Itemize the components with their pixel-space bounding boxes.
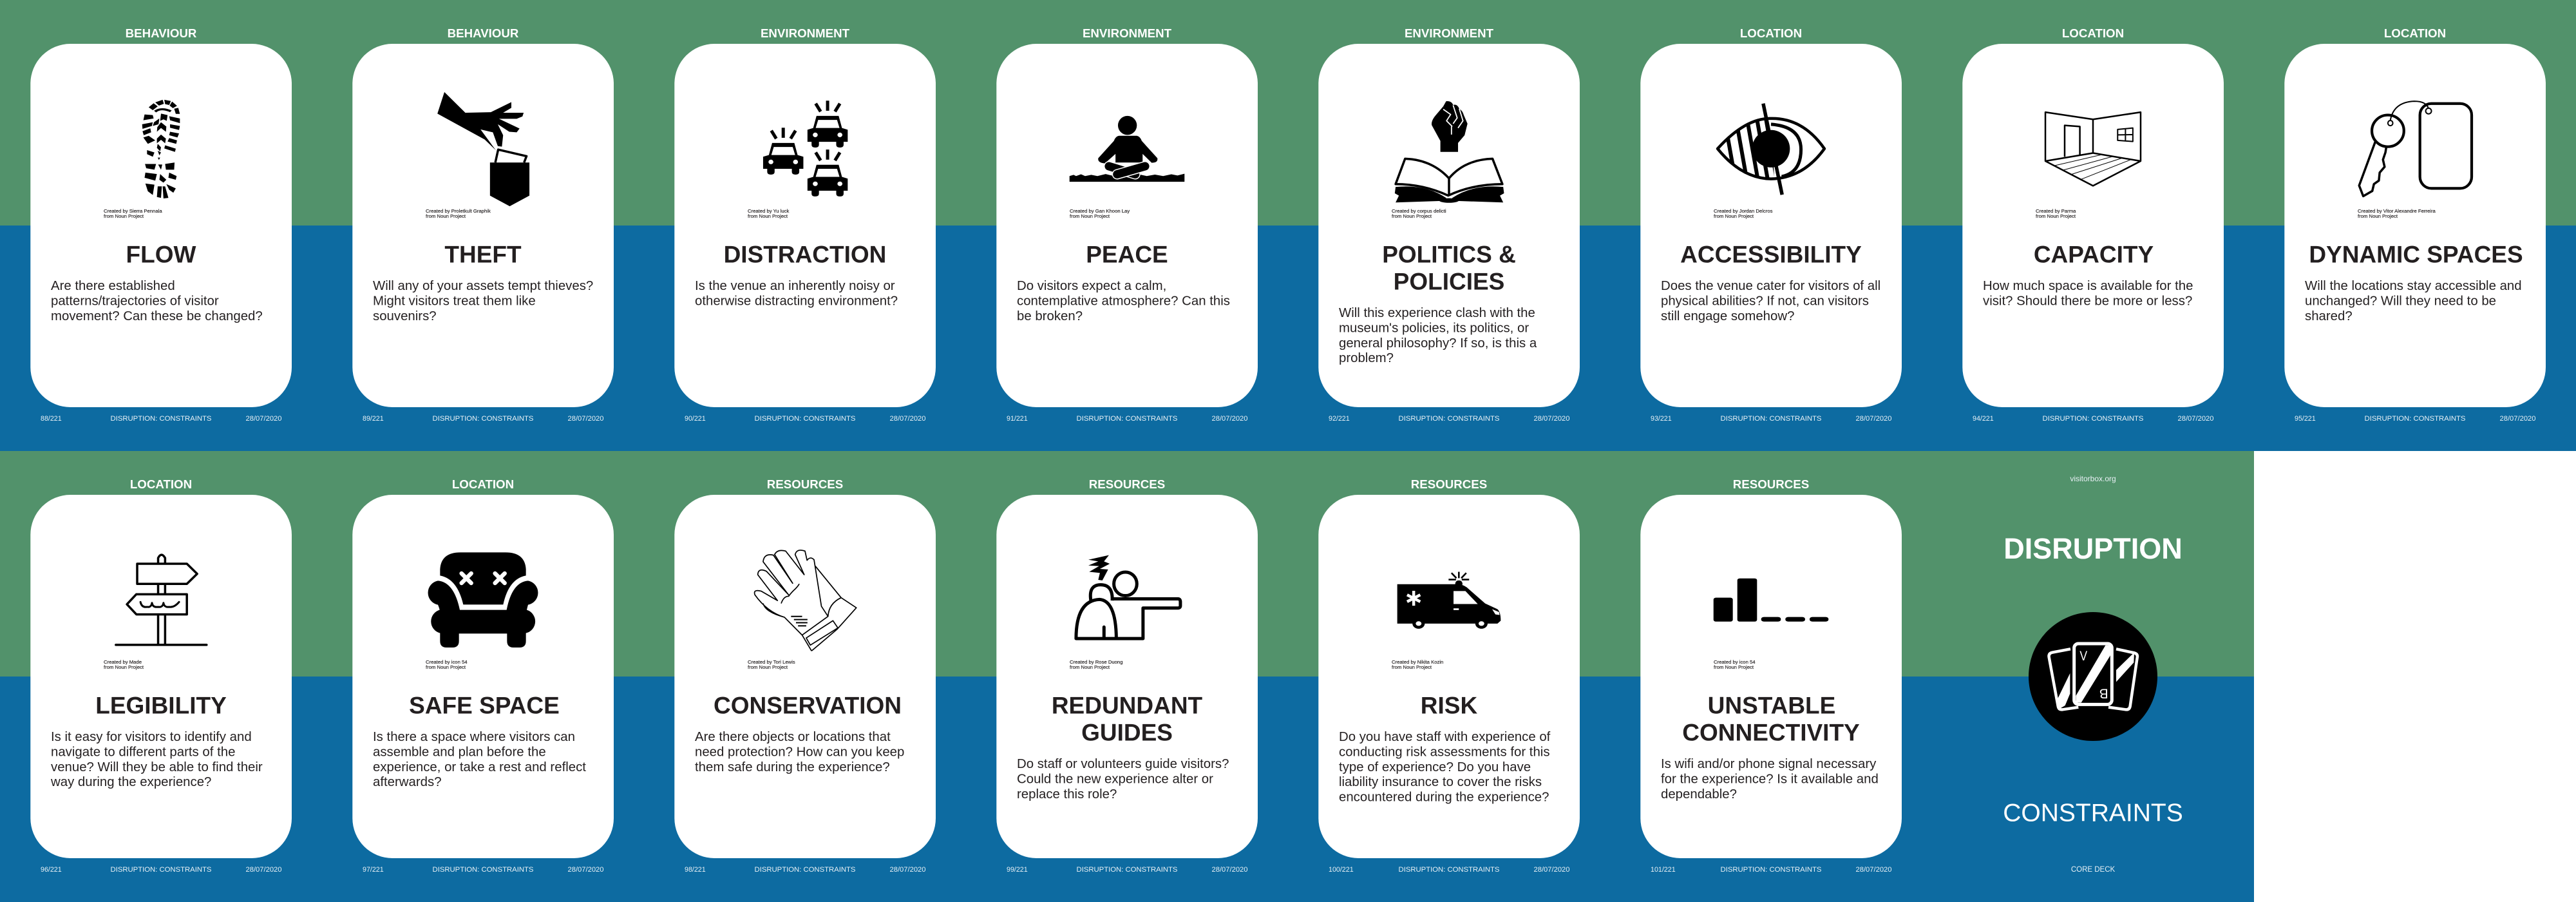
icon credit: Created by Proletkult Graphik bbox=[426, 208, 491, 214]
date: 28/07/2020 bbox=[1856, 415, 1892, 423]
card title: ACCESSIBILITY bbox=[1680, 241, 1862, 267]
category label: LOCATION bbox=[130, 477, 192, 491]
question: general philosophy? If so, is this a bbox=[1339, 336, 1537, 350]
card title: PEACE bbox=[1086, 241, 1168, 267]
icon credit: from Noun Project bbox=[1070, 213, 1110, 219]
question: unchanged? Will they need to be bbox=[2305, 294, 2496, 308]
question: Might visitors treat them like bbox=[373, 294, 536, 308]
card panel bbox=[1962, 44, 2224, 407]
icon credit: Created by icon 54 bbox=[426, 659, 468, 665]
icon: key with tag bbox=[2359, 101, 2472, 196]
question: museum's policies, its politics, or bbox=[1339, 321, 1529, 335]
card panel bbox=[674, 495, 936, 858]
question: still engage somehow? bbox=[1661, 309, 1794, 323]
date: 28/07/2020 bbox=[890, 415, 926, 423]
icon credit: from Noun Project bbox=[1392, 664, 1432, 670]
icon: obscured eye bbox=[1718, 104, 1824, 195]
card panel bbox=[30, 44, 292, 407]
icon credit: from Noun Project bbox=[426, 664, 466, 670]
question: encountered during the experience? bbox=[1339, 791, 1549, 805]
question: venue? Will they be able to find their bbox=[51, 760, 263, 774]
category label: RESOURCES bbox=[1089, 477, 1165, 491]
card panel bbox=[352, 44, 614, 407]
question: liability insurance to cover the risks bbox=[1339, 775, 1542, 789]
question: souvenirs? bbox=[373, 309, 437, 323]
category label: ENVIRONMENT bbox=[761, 26, 850, 40]
card number: 96/221 bbox=[41, 866, 62, 874]
question: problem? bbox=[1339, 351, 1394, 365]
card title: REDUNDANT bbox=[1052, 692, 1203, 718]
icon: fist over open book bbox=[1395, 101, 1504, 203]
card number: 98/221 bbox=[685, 866, 706, 874]
card title: FLOW bbox=[126, 241, 196, 267]
icon: protective gloves bbox=[755, 550, 857, 651]
card: Dynamic Spaces bbox=[2284, 26, 2546, 423]
category label: LOCATION bbox=[2062, 26, 2124, 40]
card panel bbox=[674, 44, 936, 407]
icon credit: Created by Made bbox=[104, 659, 142, 665]
card: Risk bbox=[1318, 477, 1580, 874]
card panel bbox=[1318, 495, 1580, 858]
icon credit: Created by Sierra Pennala bbox=[104, 208, 162, 214]
card: Legibility bbox=[30, 477, 292, 874]
card: Safe Space bbox=[352, 477, 614, 874]
icon credit: Created by Vitor Alexandre Ferreira bbox=[2358, 208, 2436, 214]
card number: 94/221 bbox=[1973, 415, 1994, 423]
card panel bbox=[352, 495, 614, 858]
card title: DYNAMIC SPACES bbox=[2309, 241, 2523, 267]
icon: three honking cars bbox=[763, 101, 848, 197]
icon credit: from Noun Project bbox=[748, 664, 788, 670]
card number: 91/221 bbox=[1007, 415, 1028, 423]
question: Is there a space where visitors can bbox=[373, 730, 575, 744]
question: Are there objects or locations that bbox=[695, 730, 891, 744]
icon credit: Created by Jordan Delcros bbox=[1714, 208, 1773, 214]
deck name: DISRUPTION: CONSTRAINTS bbox=[433, 415, 534, 423]
card: Accessibility bbox=[1640, 26, 1902, 423]
icon credit: from Noun Project bbox=[104, 664, 144, 670]
deck name: DISRUPTION: CONSTRAINTS bbox=[1077, 866, 1178, 874]
category label: BEHAVIOUR bbox=[126, 26, 197, 40]
icon credit: Created by corpus delicti bbox=[1392, 208, 1446, 214]
card title: UNSTABLE bbox=[1708, 692, 1835, 718]
question: patterns/trajectories of visitor bbox=[51, 294, 219, 308]
card: Redundant Guides bbox=[996, 477, 1258, 874]
deck label: CORE DECK bbox=[2071, 866, 2116, 874]
card title: LEGIBILITY bbox=[95, 692, 227, 718]
category label: LOCATION bbox=[452, 477, 514, 491]
icon credit: from Noun Project bbox=[1714, 664, 1754, 670]
website: visitorbox.org bbox=[2070, 474, 2116, 483]
icon credit: Created by Parma bbox=[2036, 208, 2076, 214]
card title: DISTRACTION bbox=[724, 241, 886, 267]
deck name: DISRUPTION: CONSTRAINTS bbox=[755, 415, 856, 423]
card number: 97/221 bbox=[363, 866, 384, 874]
card: Conservation bbox=[674, 477, 936, 874]
icon credit: Created by Tori Lewis bbox=[748, 659, 795, 665]
cover subtitle: constraints: CONSTRAINTS bbox=[2003, 799, 2183, 827]
question: replace this role? bbox=[1017, 787, 1117, 801]
card title: GUIDES bbox=[1081, 719, 1173, 745]
icon: meditating figure bbox=[1070, 116, 1184, 182]
category label: RESOURCES bbox=[1411, 477, 1487, 491]
category label: RESOURCES bbox=[1733, 477, 1809, 491]
question: experience, or take a rest and reflect bbox=[373, 760, 586, 774]
card title: SAFE SPACE bbox=[409, 692, 560, 718]
question: Is the venue an inherently noisy or bbox=[695, 279, 895, 293]
card title: CAPACITY bbox=[2034, 241, 2154, 267]
icon credit: from Noun Project bbox=[2036, 213, 2076, 219]
logo: three cards in black circle: B bbox=[2099, 686, 2108, 700]
card panel bbox=[1640, 495, 1902, 858]
icon credit: from Noun Project bbox=[426, 213, 466, 219]
deck name: DISRUPTION: CONSTRAINTS bbox=[1077, 415, 1178, 423]
question: Will the locations stay accessible and bbox=[2305, 279, 2522, 293]
question: Will this experience clash with the bbox=[1339, 306, 1535, 320]
question: need protection? How can you keep bbox=[695, 745, 904, 759]
card: Flow bbox=[30, 26, 292, 423]
question: Is wifi and/or phone signal necessary bbox=[1661, 757, 1877, 771]
question: How much space is available for the bbox=[1983, 279, 2193, 293]
question: for the experience? Is it available and bbox=[1661, 772, 1879, 786]
deck name: DISRUPTION: CONSTRAINTS bbox=[433, 866, 534, 874]
date: 28/07/2020 bbox=[246, 415, 282, 423]
deck name: DISRUPTION: CONSTRAINTS bbox=[1721, 415, 1822, 423]
question: them safe during the experience? bbox=[695, 760, 890, 774]
date: 28/07/2020 bbox=[246, 866, 282, 874]
category label: RESOURCES bbox=[767, 477, 843, 491]
category label: LOCATION bbox=[2384, 26, 2446, 40]
date: 28/07/2020 bbox=[2178, 415, 2214, 423]
icon: guide pointing with confused visitor bbox=[1076, 555, 1180, 638]
deck name: DISRUPTION: CONSTRAINTS bbox=[111, 866, 212, 874]
icon credit: from Noun Project bbox=[1392, 213, 1432, 219]
card number: 92/221 bbox=[1329, 415, 1350, 423]
date: 28/07/2020 bbox=[568, 866, 604, 874]
icon credit: from Noun Project bbox=[1070, 664, 1110, 670]
card panel bbox=[1318, 44, 1580, 407]
icon credit: Created by Gan Khoon Lay bbox=[1070, 208, 1130, 214]
card panel bbox=[2284, 44, 2546, 407]
date: 28/07/2020 bbox=[1534, 866, 1570, 874]
category label: ENVIRONMENT bbox=[1083, 26, 1172, 40]
cover title: disruption: DISRUPTION bbox=[2003, 532, 2183, 565]
date: 28/07/2020 bbox=[1212, 866, 1248, 874]
card: Theft bbox=[352, 26, 614, 423]
question: Are there established bbox=[51, 279, 175, 293]
question: contemplative atmosphere? Can this bbox=[1017, 294, 1230, 308]
icon: hand and pocket bbox=[437, 92, 529, 206]
logo: three cards in black circle bbox=[2029, 612, 2157, 741]
card: Distraction bbox=[674, 26, 936, 423]
icon credit: from Noun Project bbox=[748, 213, 788, 219]
question: Do staff or volunteers guide visitors? bbox=[1017, 757, 1229, 771]
question: dependable? bbox=[1661, 787, 1737, 801]
question: type of experience? Do you have bbox=[1339, 760, 1531, 774]
card title: POLITICS & bbox=[1382, 241, 1516, 267]
deck name: DISRUPTION: CONSTRAINTS bbox=[1399, 866, 1500, 874]
icon: weak signal bars bbox=[1714, 579, 1828, 622]
icon: boot print bbox=[142, 100, 180, 198]
question: Does the venue cater for visitors of all bbox=[1661, 279, 1880, 293]
card: Peace bbox=[996, 26, 1258, 423]
date: 28/07/2020 bbox=[890, 866, 926, 874]
card number: 101/221 bbox=[1651, 866, 1676, 874]
question: afterwards? bbox=[373, 775, 442, 789]
question: way during the experience? bbox=[50, 775, 211, 789]
question: visit? Should there be more or less? bbox=[1983, 294, 2192, 308]
icon credit: from Noun Project bbox=[1714, 213, 1754, 219]
question: shared? bbox=[2305, 309, 2353, 323]
logo: three cards in black circle: V bbox=[2079, 648, 2088, 664]
icon credit: from Noun Project bbox=[2358, 213, 2398, 219]
card number: 88/221 bbox=[41, 415, 62, 423]
card panel bbox=[996, 44, 1258, 407]
card title: RISK bbox=[1421, 692, 1477, 718]
category label: BEHAVIOUR bbox=[448, 26, 519, 40]
deck name: DISRUPTION: CONSTRAINTS bbox=[111, 415, 212, 423]
question: Will any of your assets tempt thieves? bbox=[373, 279, 593, 293]
deck name: DISRUPTION: CONSTRAINTS bbox=[2365, 415, 2466, 423]
date: 28/07/2020 bbox=[568, 415, 604, 423]
card title: POLICIES bbox=[1394, 268, 1504, 294]
card number: 95/221 bbox=[2295, 415, 2316, 423]
question: movement? Can these be changed? bbox=[51, 309, 263, 323]
icon: armchair bbox=[428, 552, 538, 648]
question: conducting risk assessments for this bbox=[1339, 745, 1550, 759]
question: Could the new experience alter or bbox=[1017, 772, 1213, 786]
card panel bbox=[996, 495, 1258, 858]
question: Is it easy for visitors to identify and bbox=[51, 730, 252, 744]
card: Unstable Connectivity bbox=[1640, 477, 1902, 874]
icon credit: Created by Rose Duong bbox=[1070, 659, 1122, 665]
date: 28/07/2020 bbox=[2500, 415, 2536, 423]
card panel bbox=[1640, 44, 1902, 407]
card title: CONSERVATION bbox=[714, 692, 902, 718]
question: assemble and plan before the bbox=[373, 745, 546, 759]
deck name: DISRUPTION: CONSTRAINTS bbox=[1721, 866, 1822, 874]
icon: empty room bbox=[2045, 112, 2141, 186]
icon credit: from Noun Project bbox=[104, 213, 144, 219]
card number: 93/221 bbox=[1651, 415, 1672, 423]
deck name: DISRUPTION: CONSTRAINTS bbox=[1399, 415, 1500, 423]
card number: 90/221 bbox=[685, 415, 706, 423]
card number: 100/221 bbox=[1329, 866, 1354, 874]
icon: signpost bbox=[116, 555, 207, 645]
deck name: DISRUPTION: CONSTRAINTS bbox=[2043, 415, 2144, 423]
question: otherwise distracting environment? bbox=[695, 294, 898, 308]
card: Politics and Policies bbox=[1318, 26, 1580, 423]
question: Do visitors expect a calm, bbox=[1017, 279, 1166, 293]
question: physical abilities? If not, can visitors bbox=[1661, 294, 1869, 308]
panel: deck cover bbox=[2003, 474, 2183, 874]
category label: ENVIRONMENT bbox=[1405, 26, 1494, 40]
date: 28/07/2020 bbox=[1212, 415, 1248, 423]
icon credit: Created by icon 54 bbox=[1714, 659, 1756, 665]
card number: 99/221 bbox=[1007, 866, 1028, 874]
card title: CONNECTIVITY bbox=[1682, 719, 1860, 745]
date: 28/07/2020 bbox=[1856, 866, 1892, 874]
question: Do you have staff with experience of bbox=[1339, 730, 1551, 744]
category label: LOCATION bbox=[1740, 26, 1802, 40]
card number: 89/221 bbox=[363, 415, 384, 423]
icon credit: Created by Nikita Kozin bbox=[1392, 659, 1443, 665]
icon: ambulance bbox=[1397, 572, 1501, 629]
card title: THEFT bbox=[444, 241, 522, 267]
question: navigate to different parts of the bbox=[51, 745, 235, 759]
deck name: DISRUPTION: CONSTRAINTS bbox=[755, 866, 856, 874]
card: Capacity bbox=[1962, 26, 2224, 423]
question: be broken? bbox=[1017, 309, 1083, 323]
card panel bbox=[30, 495, 292, 858]
date: 28/07/2020 bbox=[1534, 415, 1570, 423]
icon credit: Created by Yu luck bbox=[748, 208, 790, 214]
